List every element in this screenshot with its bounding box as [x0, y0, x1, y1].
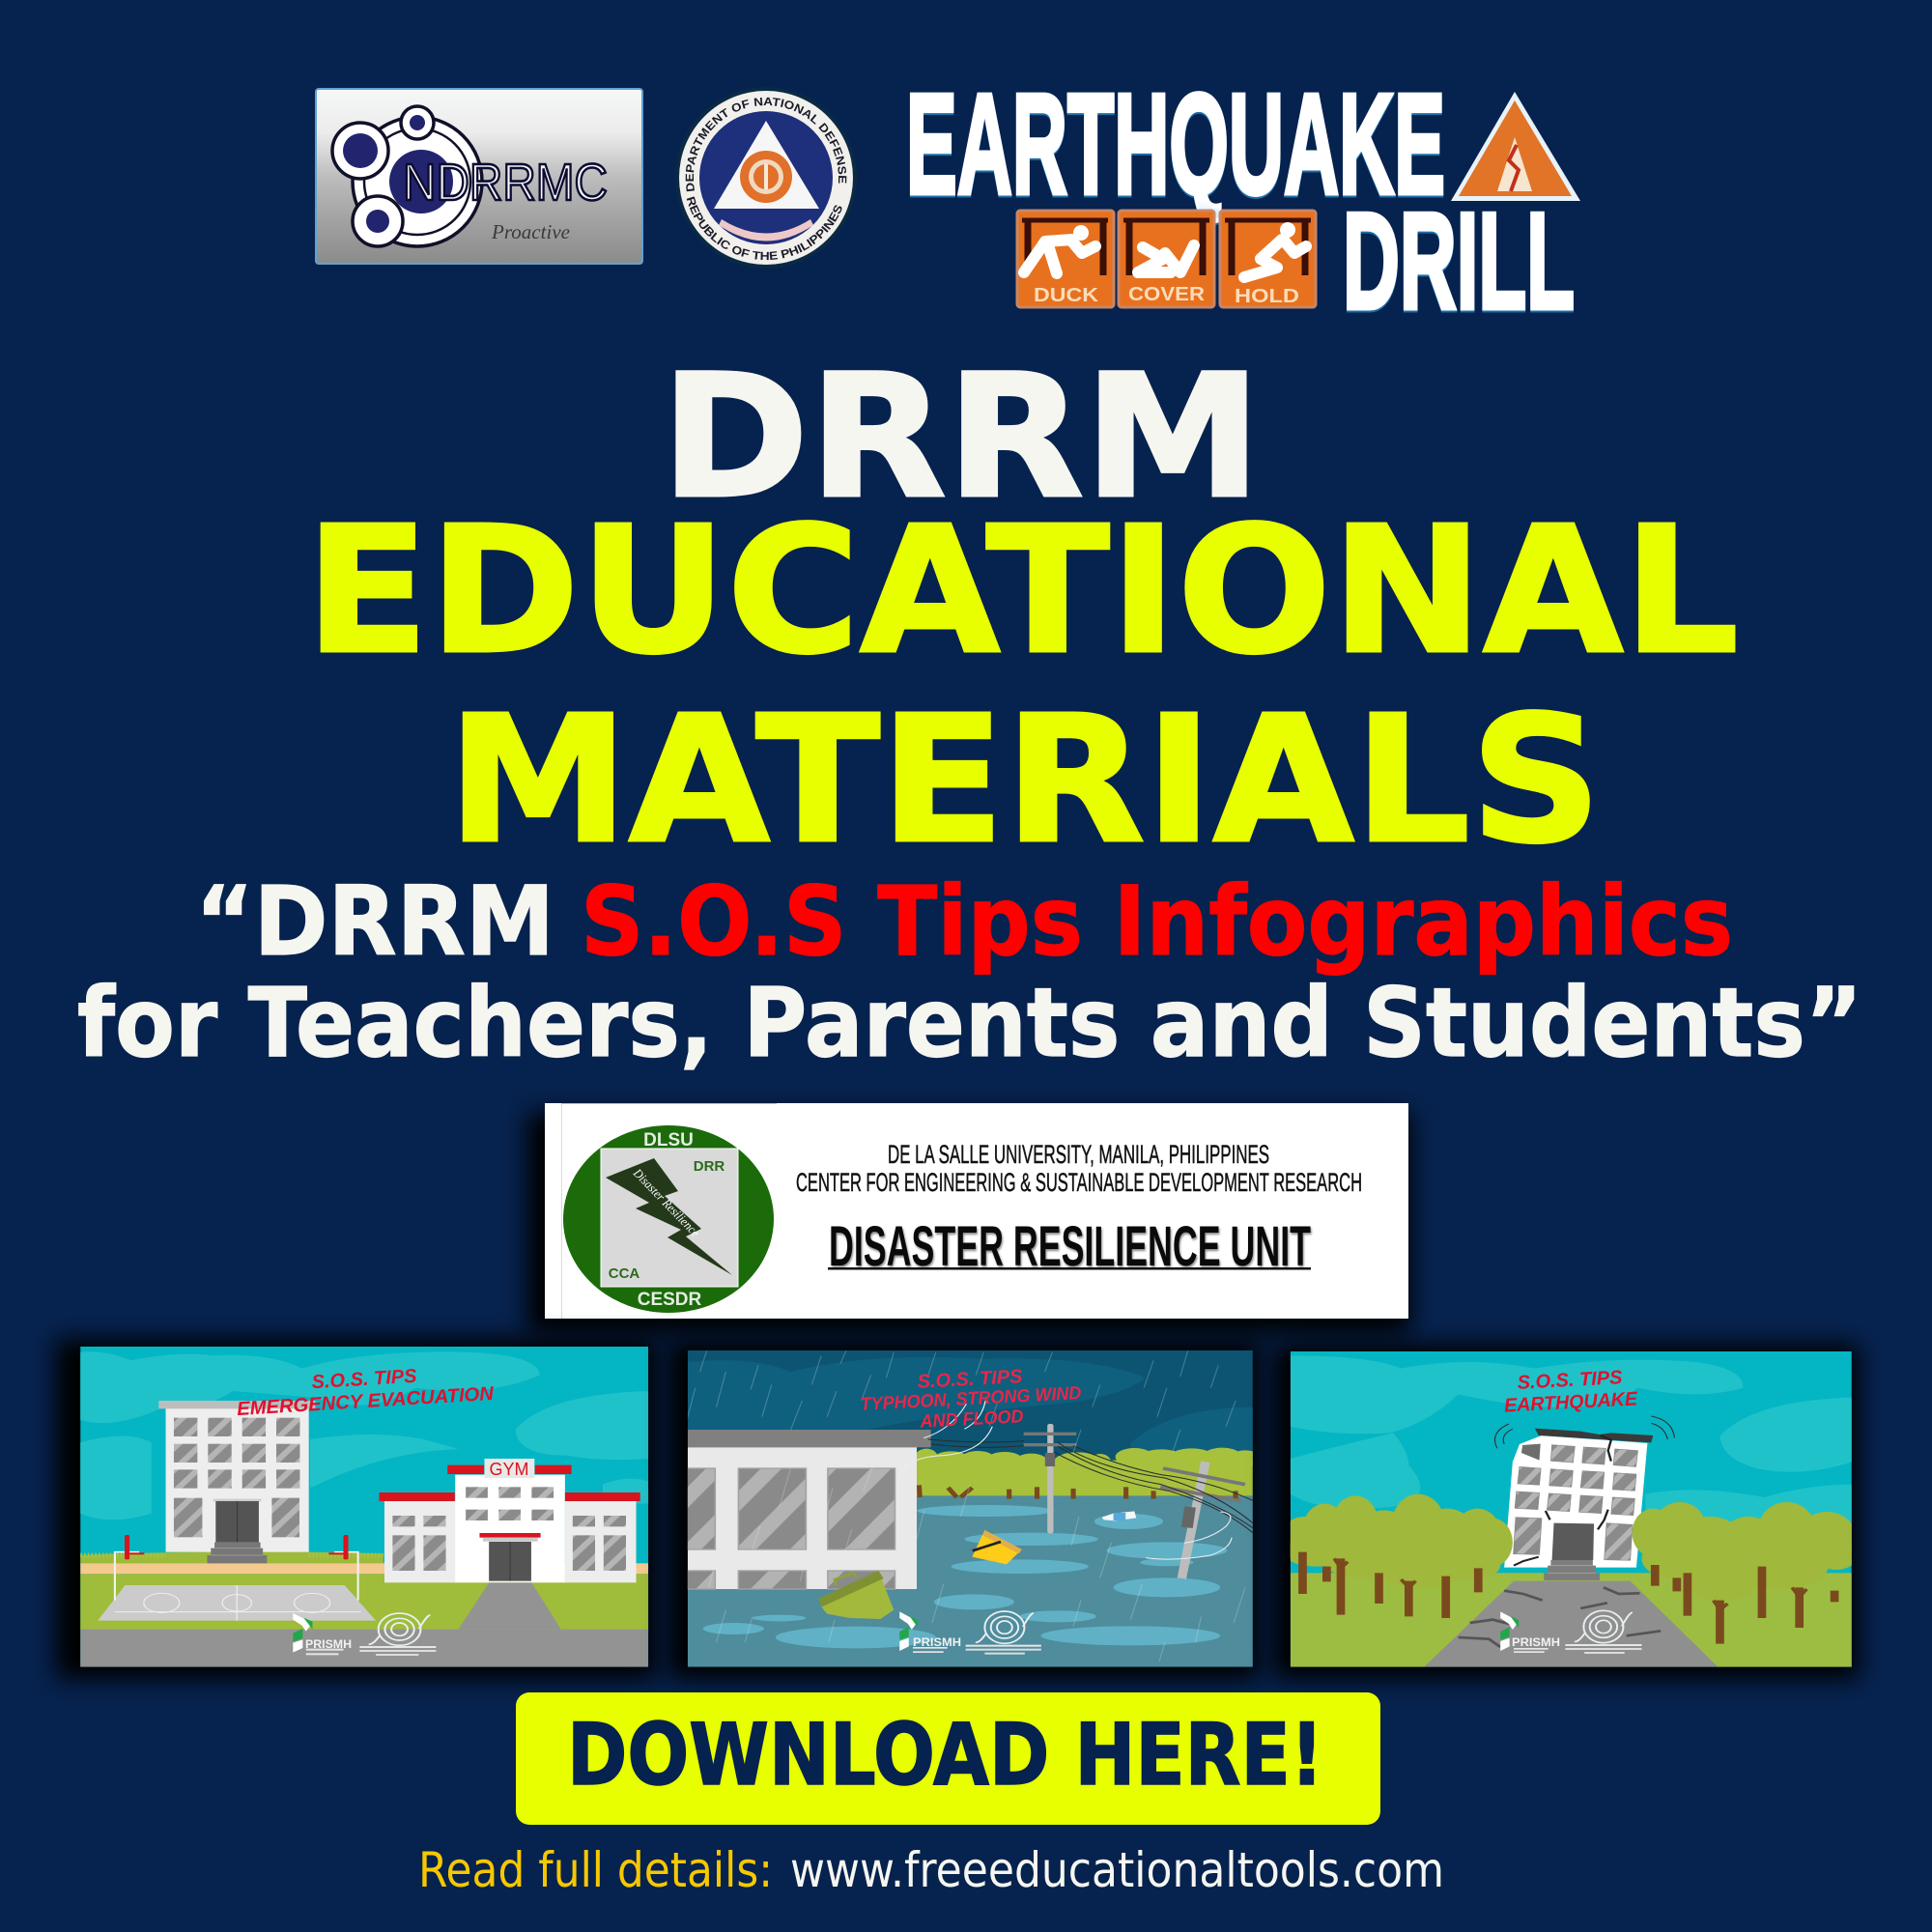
subtitle: S.O.S Tips Infographics	[581, 867, 1733, 978]
icon: hold: HOLD	[1235, 286, 1299, 307]
logo: NDRRMC: Proactive	[491, 220, 570, 243]
drill wordmark: DRILL	[1343, 185, 1575, 338]
panel text: AND FLOOD	[919, 1406, 1024, 1433]
subtitle: “DRRM	[195, 867, 554, 978]
logo: DLSU: CESDR	[638, 1290, 702, 1310]
icon: cover: COVER	[1128, 284, 1206, 305]
button: download here	[516, 1692, 1380, 1825]
icon: duck	[1017, 211, 1114, 307]
icon: cover	[1119, 211, 1214, 307]
footer: read full details: Read full details:	[418, 1842, 773, 1898]
foliage	[1291, 1493, 1852, 1573]
icon: hold	[1220, 211, 1316, 307]
panel text	[237, 1366, 495, 1420]
logo: department of national defense seal: DEPARTMENT OF NATIONAL DEFENSE	[686, 97, 846, 191]
title: DRRM: DRRM	[661, 338, 1262, 536]
logo: DLSU: DRR	[694, 1158, 724, 1175]
panel: typhoon, strong wind and flood	[668, 1341, 1261, 1679]
grass blades	[80, 1553, 384, 1557]
school building	[166, 1407, 309, 1552]
panel: DLSU disaster resilience unit banner	[527, 1103, 1410, 1333]
logo: DLSU: CCA	[609, 1265, 639, 1282]
text: disaster resilience unit: DISASTER RESILIENCE UNIT	[829, 1215, 1311, 1278]
button: download here: DOWNLOAD HERE!	[567, 1705, 1323, 1804]
logo: NDRRMC	[316, 89, 642, 264]
panel: typhoon, strong wind and flood: PRISMH	[913, 1635, 961, 1649]
footer: read full details	[418, 1842, 1444, 1898]
subtitle	[77, 867, 1862, 1079]
logo: department of national defense seal	[675, 87, 857, 269]
poles and wires	[1047, 1424, 1054, 1533]
panel: emergency evacuation	[56, 1339, 657, 1679]
logo: department of national defense seal: REPUBLIC OF THE PHILIPPINES	[686, 196, 842, 261]
treeline	[915, 1448, 1261, 1497]
panel text: EARTHQUAKE	[1504, 1388, 1638, 1417]
title: MATERIALS: MATERIALS	[447, 678, 1602, 882]
panel text	[860, 1366, 1082, 1433]
text: university name	[796, 1140, 1362, 1197]
panel text: S.O.S. TIPS	[1517, 1367, 1624, 1394]
icon: duck: DUCK	[1034, 285, 1099, 306]
logo: earthquake drill	[906, 65, 1580, 338]
panel: earthquake	[1273, 1345, 1859, 1679]
icon: warning triangle	[1451, 92, 1580, 201]
panel text: EMERGENCY EVACUATION	[237, 1383, 495, 1420]
gym building	[384, 1500, 456, 1582]
floating objects	[972, 1530, 1022, 1564]
building	[1504, 1435, 1647, 1568]
panel: earthquake: PRISMH	[1512, 1635, 1560, 1649]
trunks	[1302, 1552, 1834, 1644]
logo: DLSU	[563, 1125, 774, 1313]
text: university name: DE LA SALLE UNIVERSITY, MANILA, PHILIPPINES	[888, 1140, 1269, 1169]
logo: DLSU: Disaster Resilience	[630, 1165, 703, 1239]
earthquake wordmark: EARTHQUAKE	[906, 65, 1445, 224]
panel text	[1504, 1367, 1638, 1417]
panel text: S.O.S. TIPS	[917, 1366, 1024, 1393]
logo: NDRRMC: NDRRMC	[403, 154, 608, 212]
panel: emergency evacuation: GYM	[489, 1460, 529, 1479]
title: EDUCATIONAL: EDUCATIONAL	[305, 489, 1739, 693]
footer: read full details: www.freeeducationaltools.com	[790, 1842, 1444, 1898]
basketball court	[98, 1585, 376, 1621]
rain	[687, 1350, 1245, 1662]
panel: emergency evacuation: PRISMH	[305, 1637, 352, 1651]
panel text: S.O.S. TIPS	[311, 1366, 418, 1393]
logo: DLSU: DLSU	[643, 1130, 694, 1151]
text: university name: CENTER FOR ENGINEERING & SUSTAINABLE DEVELOPMENT RESEARCH	[796, 1168, 1362, 1197]
panel text: TYPHOON, STRONG WIND	[860, 1383, 1082, 1415]
building	[688, 1430, 931, 1447]
